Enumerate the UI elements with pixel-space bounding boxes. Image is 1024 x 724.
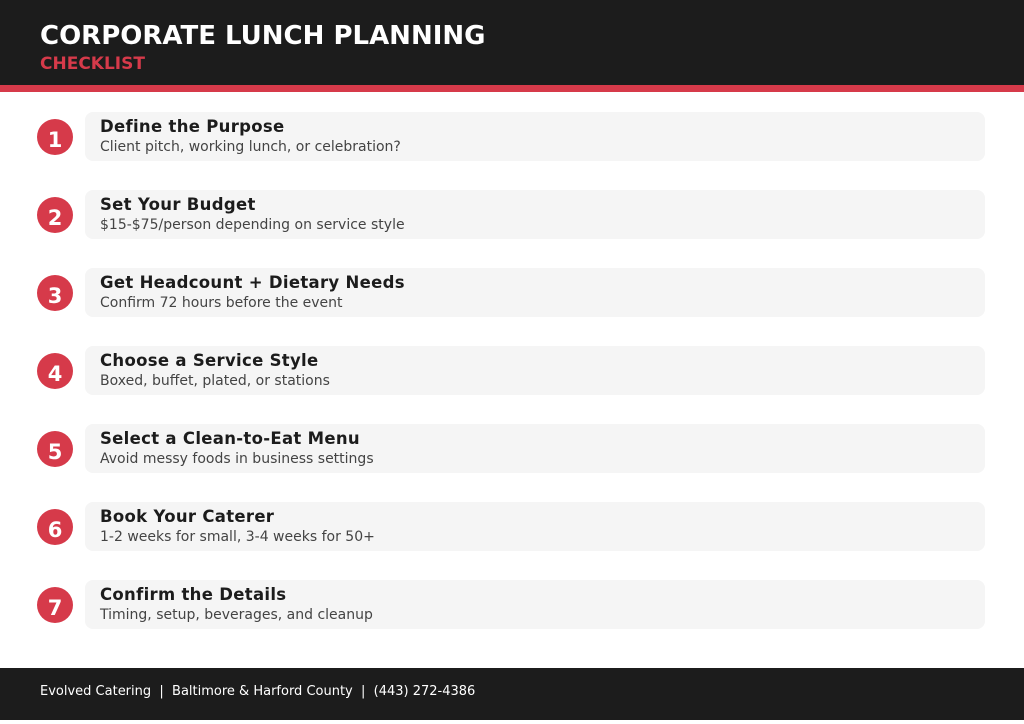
step 1 [37,112,985,161]
step 2: $15-$75/person depending on service style [100,217,405,233]
step 7 [37,580,985,629]
step 4 [37,346,985,395]
step 5: Avoid messy foods in business settings [100,451,374,467]
step 4: 4 [48,362,62,386]
step 5: Select a Clean-to-Eat Menu [100,429,360,448]
step 5: 5 [48,440,62,464]
step 4: Boxed, buffet, plated, or stations [100,373,330,389]
step 5 [37,424,985,473]
step 6: Book Your Caterer [100,507,275,526]
step 3: Get Headcount + Dietary Needs [100,273,405,292]
step 7: Timing, setup, beverages, and cleanup [99,607,373,623]
step 6: 6 [48,518,62,542]
step 2: 2 [48,206,62,230]
step 4: Choose a Service Style [100,351,318,370]
step 2: Set Your Budget [100,195,256,214]
step 1: Client pitch, working lunch, or celebration? [100,139,401,155]
step 3: 3 [48,284,62,308]
subtitle: CHECKLIST [40,54,145,74]
step 7: Confirm the Details [100,585,286,604]
header [0,0,1024,92]
step 3: Confirm 72 hours before the event [100,295,343,311]
step 7: 7 [48,596,62,620]
step 6: 1-2 weeks for small, 3-4 weeks for 50+ [100,529,375,545]
step 6 [37,502,985,551]
title: CORPORATE LUNCH PLANNING [40,21,485,51]
footer [0,668,1024,720]
footer: Evolved Catering | Baltimore & Harford County | (443) 272-4386 [40,684,475,699]
step 1: 1 [48,128,62,152]
step 3 [37,268,985,317]
step 1: Define the Purpose [100,117,285,136]
step 2 [37,190,985,239]
